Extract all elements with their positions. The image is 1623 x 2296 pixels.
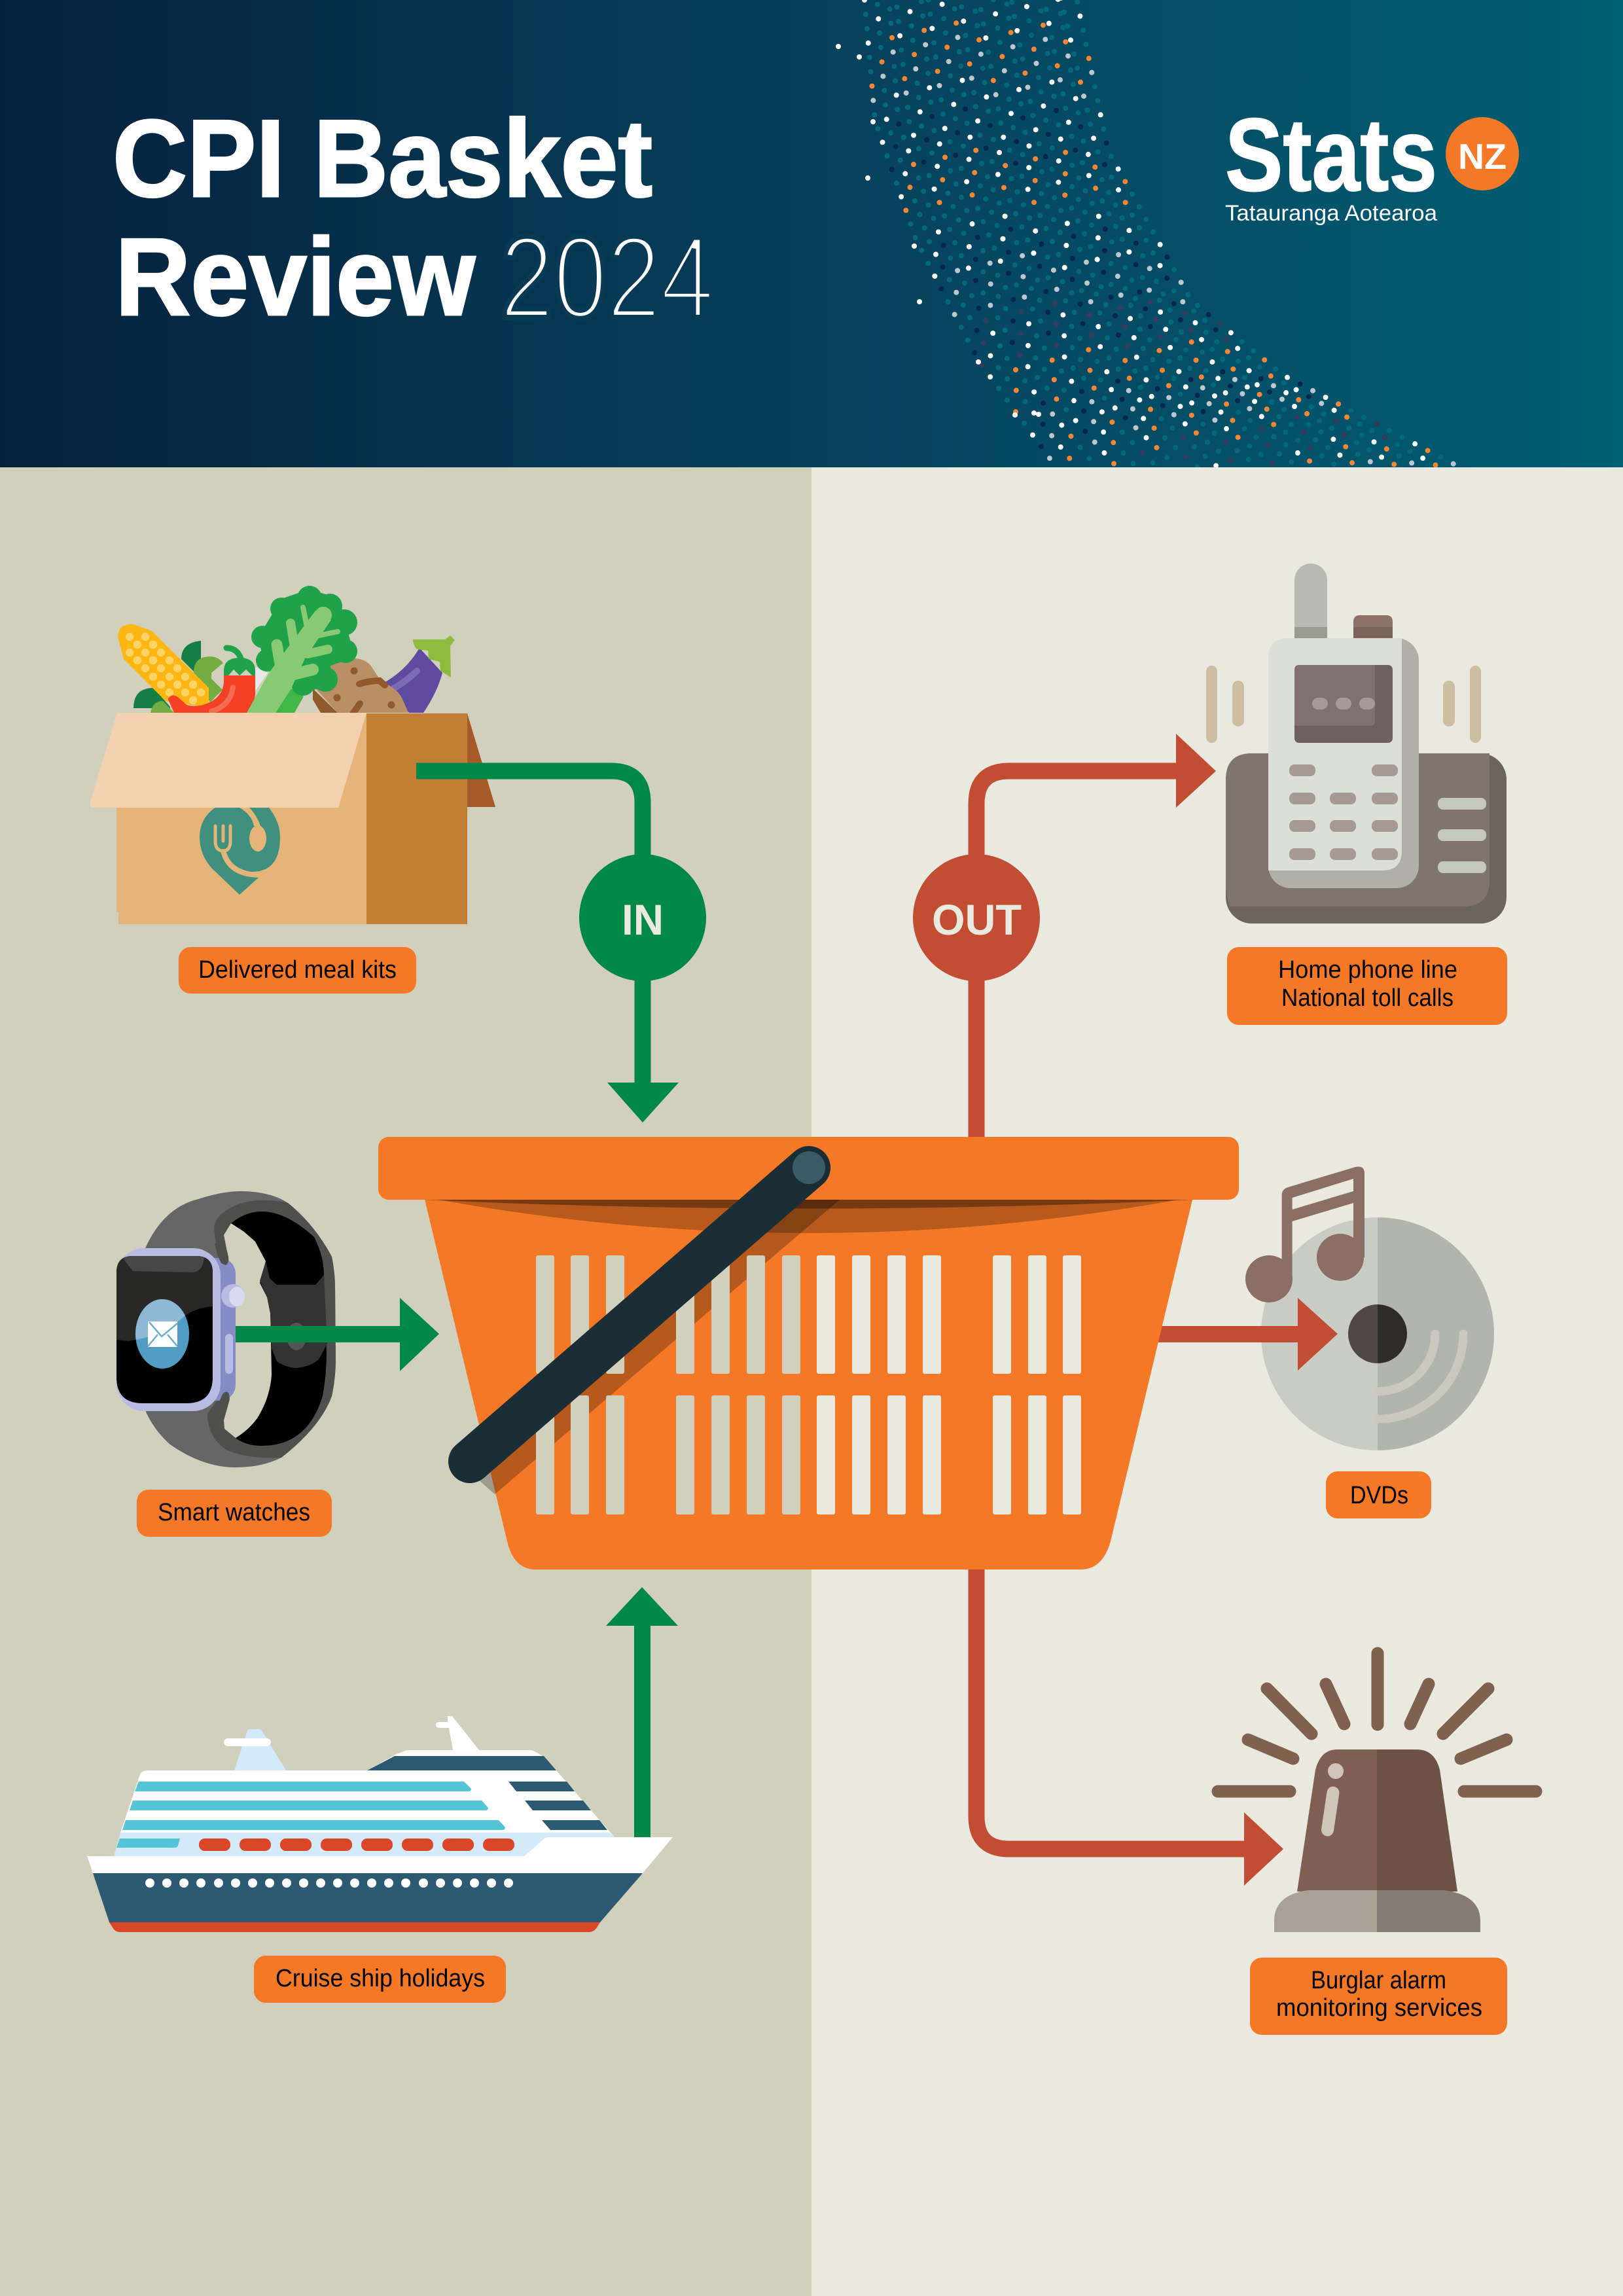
label: cruise ship holidays <box>254 1956 506 2003</box>
title: 2024 <box>500 212 714 342</box>
handset <box>1268 638 1419 888</box>
icon: burglar alarm siren <box>1218 1653 1536 1932</box>
icon: smart watch <box>116 1191 336 1467</box>
label: burglar alarm monitoring services: Burglar alarm <box>1311 1967 1446 1994</box>
logo: Stats NZ: NZ <box>1458 136 1507 177</box>
logo: Stats NZ: Stats <box>1225 98 1437 213</box>
IN badge <box>579 854 706 981</box>
label: delivered meal kits <box>179 947 416 994</box>
basket handle <box>470 1168 809 1462</box>
header banner <box>0 0 1623 467</box>
arrow: meal kits into basket <box>416 771 679 1122</box>
icon: cruise ship <box>87 1716 673 1932</box>
label: home phone line, national toll calls: Home phone line <box>1278 956 1457 984</box>
label: smart watches: Smart watches <box>158 1499 310 1526</box>
label: home phone line, national toll calls: National toll calls <box>1281 984 1454 1012</box>
antenna and knob <box>1294 564 1327 641</box>
icon: DVD disc <box>1261 1217 1494 1450</box>
title <box>113 97 714 342</box>
arrow: phone out of basket <box>976 734 1216 1139</box>
dot pattern band <box>836 0 1460 467</box>
vegetables <box>118 586 455 713</box>
arrow: DVDs out of basket <box>1152 1217 1494 1450</box>
label: cruise ship holidays: Cruise ship holidays <box>276 1965 485 1992</box>
label: home phone line, national toll calls <box>1227 947 1507 1025</box>
label: delivered meal kits: Delivered meal kits <box>198 956 397 984</box>
arrow: burglar alarm out of basket <box>976 1564 1283 1886</box>
logo: Stats NZ: Tatauranga Aotearoa <box>1225 201 1437 226</box>
OUT badge <box>913 854 1040 981</box>
label: smart watches <box>137 1490 332 1537</box>
handle shadow <box>478 1200 840 1494</box>
title: CPI Basket <box>113 97 652 220</box>
left background panel <box>0 467 812 2296</box>
title: Review <box>115 215 475 338</box>
label: burglar alarm monitoring services: monitoring services <box>1276 1994 1482 2022</box>
label: burglar alarm monitoring services <box>1250 1958 1507 2035</box>
vibration lines <box>1206 666 1481 743</box>
phone base <box>1226 753 1507 924</box>
icon: music note <box>1245 1166 1364 1302</box>
basket rim <box>378 1137 1239 1200</box>
box <box>467 713 495 807</box>
icon: cordless home phone <box>1206 564 1507 924</box>
icon: meal kit box with vegetables <box>90 586 495 924</box>
label: DVDs: DVDs <box>1350 1482 1408 1509</box>
box logo <box>200 807 280 895</box>
alarm rays <box>1218 1653 1536 1791</box>
OUT badge: OUT <box>932 895 1022 944</box>
basket body <box>425 1200 1192 1570</box>
keypad <box>1289 764 1398 860</box>
icon: shopping basket <box>378 1137 1239 1570</box>
basket slots <box>536 1255 800 1515</box>
IN badge: IN <box>622 895 664 944</box>
label: DVDs <box>1326 1471 1431 1518</box>
arrow: smart watches and cruise into basket <box>116 1191 678 1839</box>
right background panel <box>812 467 1623 2296</box>
rim shadow <box>438 1200 1178 1233</box>
